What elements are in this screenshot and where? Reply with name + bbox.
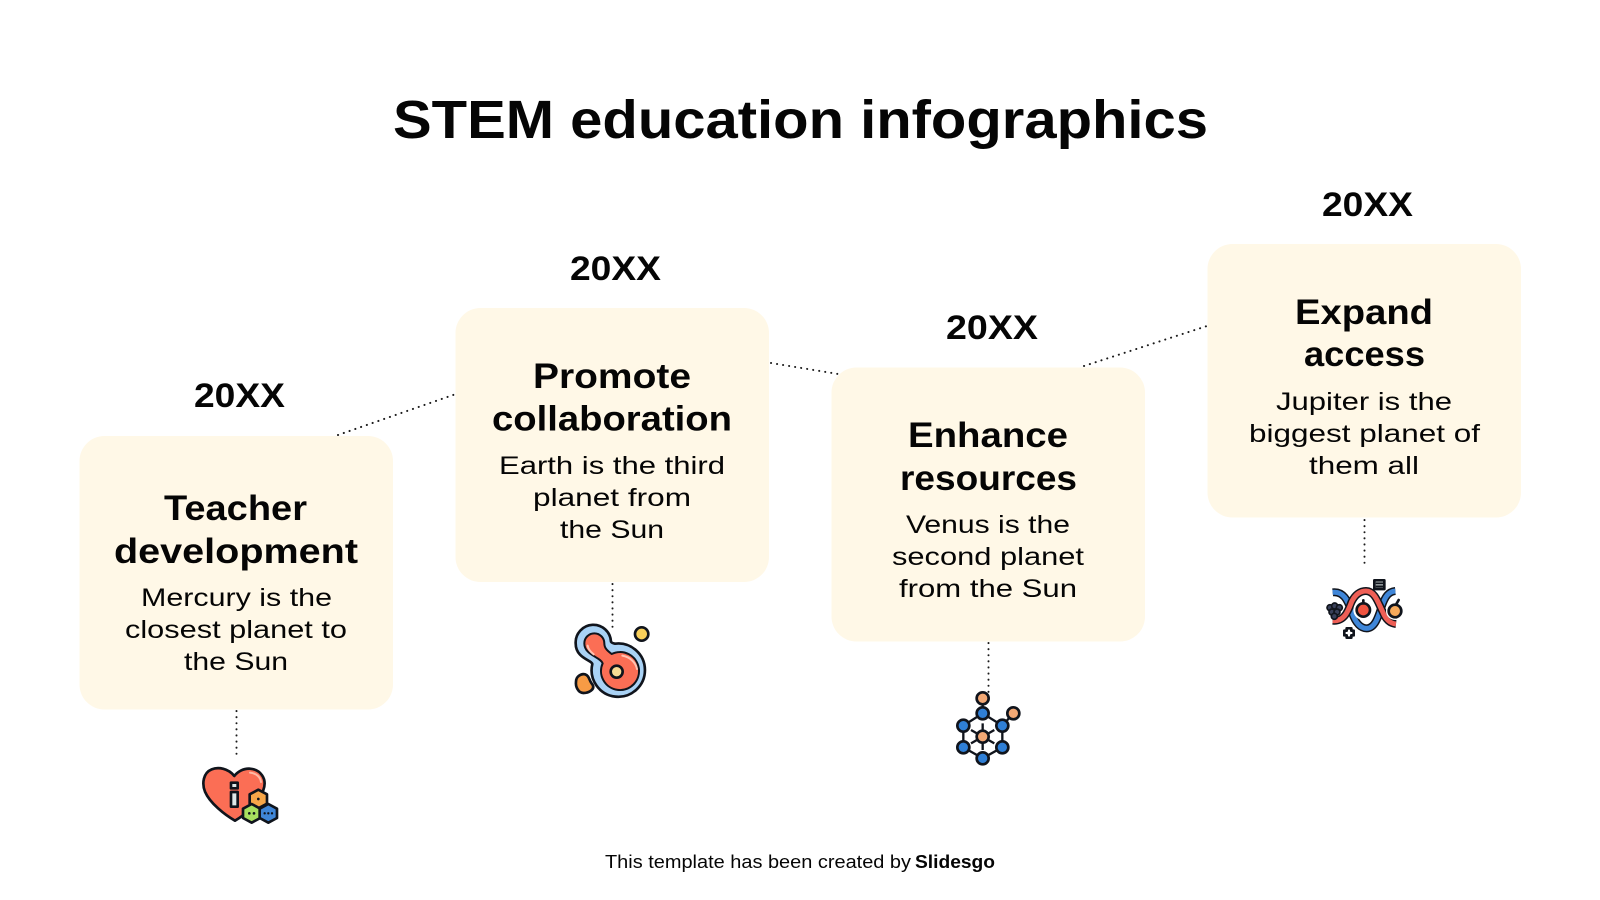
footer credit: Slidesgo: [915, 852, 995, 872]
panel: enhance resources: [832, 368, 1145, 642]
molecule bonds: [963, 698, 1013, 758]
connector: card 2 to card 3: [771, 363, 838, 374]
card heading: Teacher: [164, 489, 307, 528]
card description: them all: [1309, 452, 1419, 480]
card heading: Enhance: [908, 416, 1068, 455]
card description: planet from: [533, 484, 691, 512]
card heading: access: [1304, 335, 1425, 374]
year label 4: 20XX: [1322, 186, 1413, 224]
card heading: [900, 416, 1077, 498]
card heading: Promote: [533, 357, 691, 396]
card heading: collaboration: [492, 400, 732, 438]
card heading: development: [114, 532, 358, 571]
card description: closest planet to: [125, 616, 347, 644]
card background: [80, 436, 393, 710]
card heading: [114, 489, 358, 571]
card background: [1208, 244, 1521, 518]
molecule atoms: [957, 692, 1019, 764]
icon: food and DNA strands: [1327, 580, 1404, 638]
card description: the Sun: [184, 648, 288, 676]
footer credit: This template has been created by: [605, 852, 911, 872]
connector: card 4 to icon: [1364, 520, 1366, 568]
panel: teacher development: [80, 436, 393, 710]
icon: molecule: [957, 692, 1019, 764]
connector: card 3 to icon: [988, 643, 990, 692]
card description: [1249, 388, 1480, 480]
card heading: Expand: [1295, 293, 1433, 332]
card description: second planet: [892, 543, 1084, 571]
year label 3: 20XX: [946, 309, 1038, 347]
panel: expand access: [1208, 244, 1521, 518]
card description: the Sun: [560, 516, 664, 544]
card description: biggest planet of: [1249, 420, 1480, 448]
icon: heart with info and hexagons: [203, 768, 277, 823]
card description: Earth is the third: [499, 452, 725, 480]
card background: [832, 368, 1145, 642]
panel: promote collaboration: [456, 308, 769, 582]
connector: card 3 to card 4: [1084, 326, 1207, 366]
card description: [125, 584, 347, 676]
card description: [892, 511, 1084, 603]
year label 1: 20XX: [194, 377, 285, 415]
card heading: [492, 357, 732, 438]
card heading: [1295, 293, 1433, 374]
card background: [456, 308, 769, 582]
year label 2: 20XX: [570, 250, 661, 288]
connector: card 1 to icon: [236, 711, 238, 758]
card description: from the Sun: [899, 575, 1077, 603]
icon: cell: [576, 625, 648, 697]
card description: Jupiter is the: [1276, 388, 1452, 416]
connector: card 1 to card 2: [338, 394, 456, 435]
connector: card 2 to icon: [612, 584, 614, 632]
card description: Venus is the: [906, 511, 1070, 539]
title: STEM education infographics: [393, 90, 1208, 150]
card description: Mercury is the: [141, 584, 332, 612]
card description: [499, 452, 725, 544]
card heading: resources: [900, 459, 1077, 498]
grapes: [1327, 603, 1342, 619]
